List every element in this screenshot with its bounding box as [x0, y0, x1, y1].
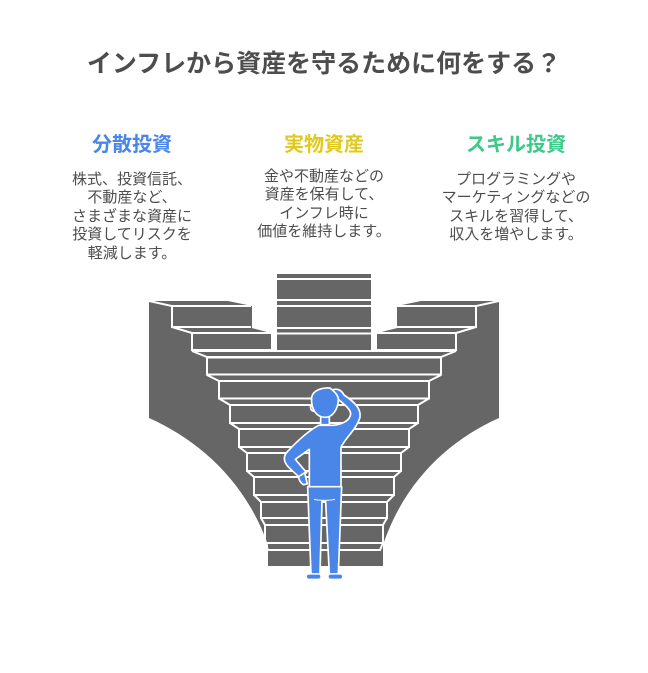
heading: real assets: 実物資産 [284, 134, 364, 156]
text: skill investment: スキルを習得して、 [449, 208, 583, 225]
text: real assets [257, 168, 391, 240]
text: real assets: 価値を維持します。 [257, 223, 391, 240]
ear [311, 404, 314, 411]
heading: skill investment: スキル投資 [466, 134, 566, 156]
heading: diversified investment: 分散投資 [92, 134, 172, 156]
text: diversified investment: 株式、投資信託、 [72, 171, 192, 188]
text: diversified investment: さまざまな資産に [72, 208, 192, 225]
title: インフレから資産を守るために何をする？ [87, 50, 561, 78]
icon: person scratching head [284, 388, 360, 579]
text: real assets: インフレ時に [279, 205, 369, 222]
text: diversified investment: 投資してリスクを [72, 226, 192, 243]
head [312, 388, 338, 417]
legs [308, 487, 342, 574]
text: skill investment: 収入を増やします。 [449, 226, 583, 243]
text: diversified investment: 軽減します。 [88, 245, 176, 262]
text: diversified investment: 不動産など、 [87, 189, 177, 206]
neck [321, 415, 329, 425]
waist line [314, 498, 335, 502]
text: real assets: 金や不動産などの [264, 168, 384, 185]
text: skill investment [442, 171, 590, 243]
staircase [149, 274, 499, 566]
text: skill investment: マーケティングなどの [442, 189, 590, 206]
feet [307, 575, 320, 579]
text: diversified investment [72, 171, 192, 262]
hand [299, 473, 307, 485]
text: real assets: 資産を保有して、 [265, 186, 383, 203]
text: skill investment: プログラミングや [456, 171, 576, 188]
torso and arms [284, 389, 360, 487]
